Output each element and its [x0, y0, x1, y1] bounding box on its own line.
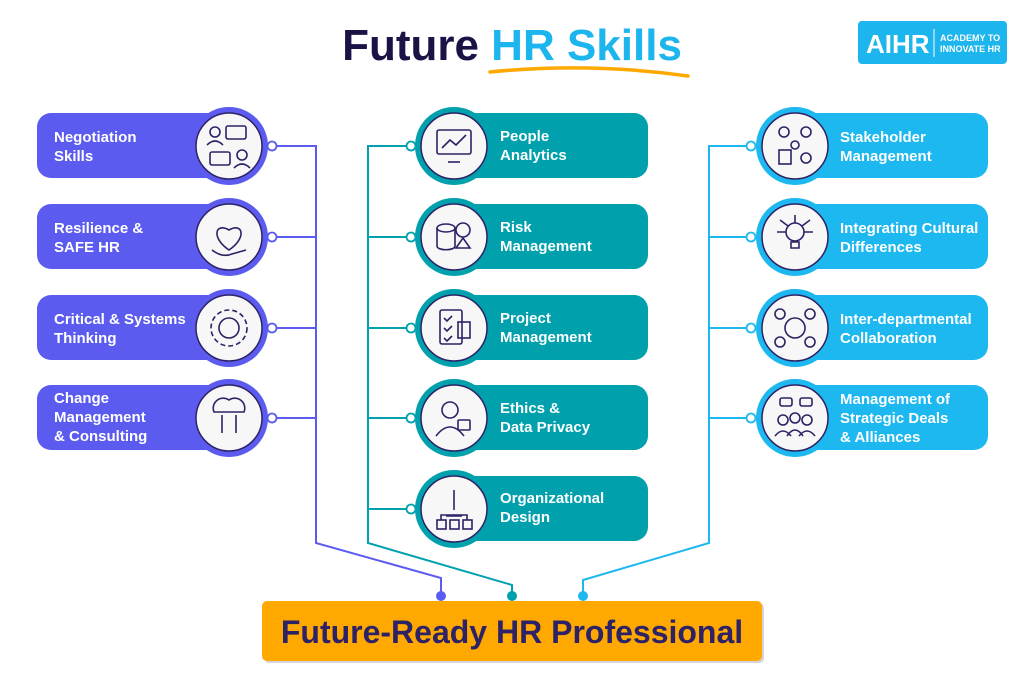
- left column: purple skills: Resilience &: [54, 220, 143, 237]
- left column: purple skills: Critical & Systems: [54, 311, 186, 328]
- left column: purple skills: Negotiation: [54, 129, 136, 146]
- icons: [207, 126, 815, 529]
- middle column: teal skills: Data Privacy: [500, 419, 591, 436]
- middle column: teal skills: Management: [500, 329, 592, 346]
- left column: purple skills: Change: [54, 390, 109, 407]
- right column: blue skills: Strategic Deals: [840, 410, 948, 427]
- icon circles: [190, 107, 834, 548]
- right column: blue skills: Inter-departmental: [840, 311, 972, 328]
- logo: AIHR: ACADEMY TO: [940, 33, 1000, 43]
- middle column: teal skills: Management: [500, 238, 592, 255]
- middle column: teal skills: People: [500, 128, 549, 145]
- middle column: teal skills: [450, 113, 648, 541]
- logo: AIHR: AIHR: [866, 29, 930, 59]
- title: Future HR Skills: [342, 21, 682, 70]
- logo: AIHR: INNOVATE HR: [940, 44, 1001, 54]
- middle column: teal skills: Analytics: [500, 147, 567, 164]
- left column: purple skills: Thinking: [54, 330, 116, 347]
- left column: purple skills: [37, 113, 227, 450]
- middle column: teal skills: Project: [500, 310, 551, 327]
- bottom banner: Future-Ready HR Professional: [262, 601, 764, 663]
- logo: AIHR: [858, 21, 1007, 64]
- middle column: teal skills: Risk: [500, 219, 532, 236]
- right column: blue skills: Management: [840, 148, 932, 165]
- right column: blue skills: Collaboration: [840, 330, 937, 347]
- right column: blue skills: Integrating Cultural: [840, 220, 978, 237]
- right column: blue skills: Management of: [840, 391, 951, 408]
- left column: purple skills: Management: [54, 409, 146, 426]
- connector dots: [268, 142, 756, 601]
- left column: purple skills: & Consulting: [54, 428, 147, 445]
- right column: blue skills: Differences: [840, 239, 922, 256]
- right column: blue skills: [790, 113, 988, 450]
- middle column: teal skills: Design: [500, 509, 550, 526]
- middle column: teal skills: Organizational: [500, 490, 604, 507]
- right column: blue skills: & Alliances: [840, 429, 920, 446]
- connector lines: [272, 146, 751, 596]
- right column: blue skills: Stakeholder: [840, 129, 926, 146]
- bottom banner: Future-Ready HR Professional: Future-Ready HR Professional: [281, 614, 743, 650]
- middle column: teal skills: Ethics &: [500, 400, 560, 417]
- left column: purple skills: Skills: [54, 148, 93, 165]
- left column: purple skills: SAFE HR: [54, 239, 120, 256]
